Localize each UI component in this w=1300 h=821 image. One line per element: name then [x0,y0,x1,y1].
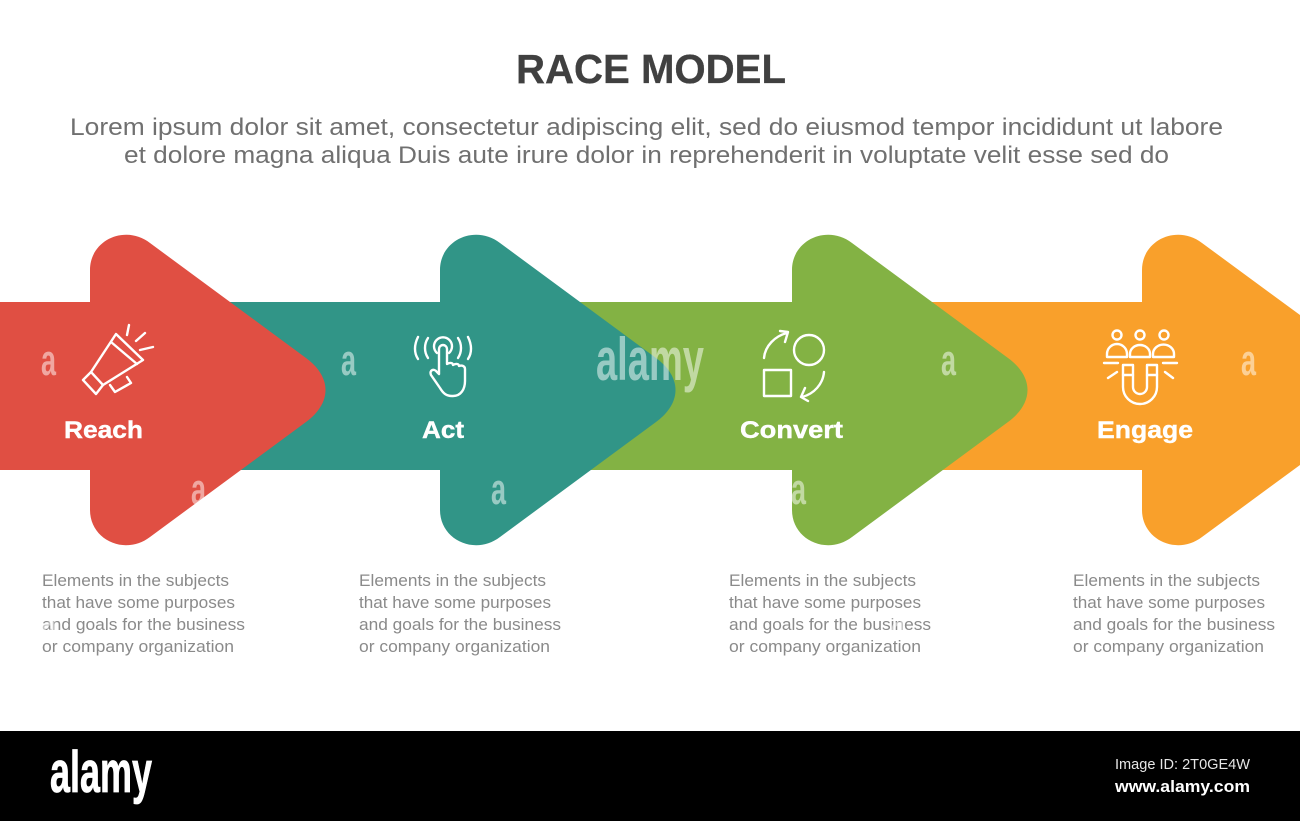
step labels: Engage [1097,417,1193,444]
watermark marks: a [41,597,56,646]
arrow: act [200,235,676,545]
footer bar [0,731,1300,821]
subtitle text [70,114,1223,169]
watermark marks: a [891,597,906,646]
description: engage: Elements in the subjects [1073,571,1260,590]
subtitle text: Lorem ipsum dolor sit amet, consectetur adipiscing elit, sed do eiusmod tempor incididunt ut labore [70,114,1223,141]
description: convert: that have some purposes [729,593,921,612]
website: www.alamy.com [1114,777,1250,796]
description: act: that have some purposes [359,593,551,612]
watermark marks: a [491,465,506,514]
description: reach: and goals for the business [42,615,245,634]
description: reach: that have some purposes [42,593,235,612]
watermark marks: a [1241,336,1256,385]
watermark marks: a [791,465,806,514]
icon: magnet people [1104,330,1177,404]
description: act: Elements in the subjects [359,571,546,590]
description: act: and goals for the business [359,615,561,634]
arrow: engage [900,235,1300,545]
description: convert: and goals for the business [729,615,931,634]
icon: convert cycle [764,331,824,401]
description: reach: Elements in the subjects [42,571,229,590]
watermark marks: a [941,336,956,385]
description: engage: or company organization [1073,637,1264,656]
step labels: Reach [64,417,143,444]
description: engage [1073,571,1275,656]
description: convert [729,571,931,656]
step labels: Convert [740,417,843,444]
description: reach: or company organization [42,637,234,656]
description: act [359,571,561,656]
icon: touch hand [415,337,471,396]
title: RACE MODEL [516,46,786,92]
description: engage: that have some purposes [1073,593,1265,612]
watermark logo: alamy [596,326,704,393]
footer logo: alamy [50,740,152,805]
watermark marks: a [341,336,356,385]
step labels: Act [422,417,464,444]
watermark marks: a [41,336,56,385]
description: reach [42,571,245,656]
image id: Image ID: 2T0GE4W [1115,756,1251,773]
subtitle text: et dolore magna aliqua Duis aute irure dolor in reprehenderit in voluptate velit esse sed do [124,142,1169,169]
watermark marks: a [191,465,206,514]
arrow: convert [550,235,1028,545]
description: convert: Elements in the subjects [729,571,916,590]
arrow: reach [0,235,326,545]
step labels [64,417,1193,444]
watermark marks [41,336,1256,646]
description: convert: or company organization [729,637,921,656]
description: engage: and goals for the business [1073,615,1275,634]
description: act: or company organization [359,637,550,656]
icon: megaphone [83,325,153,394]
